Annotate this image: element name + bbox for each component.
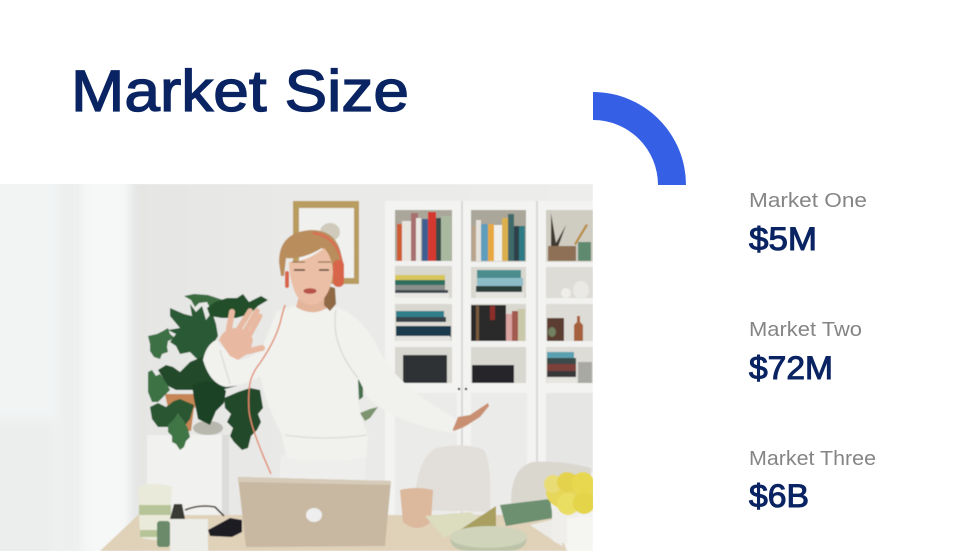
white stand (147, 435, 228, 515)
neck (296, 298, 328, 313)
market two stat: Market Two (749, 318, 862, 341)
shelf interiors (394, 266, 452, 384)
photo: woman dancing in home office (0, 164, 595, 551)
picture frame (293, 201, 359, 284)
shelf objects (551, 213, 566, 250)
flowers in vases (544, 472, 593, 544)
pot (165, 394, 198, 431)
face (289, 248, 333, 305)
pants (279, 455, 366, 483)
third row (396, 311, 444, 317)
hair (279, 230, 342, 278)
books top row (397, 224, 402, 261)
earphone cable (249, 305, 285, 474)
pencil holder, glass jar, phone (157, 504, 242, 551)
lower door panels (395, 393, 457, 550)
title: Market Size (71, 59, 409, 124)
plant (148, 294, 378, 450)
market two stat (749, 318, 862, 386)
ponytail (324, 285, 336, 311)
market three stat (749, 447, 876, 514)
headphones (313, 233, 342, 263)
books second row (395, 275, 445, 280)
market three stat: $6B (749, 478, 809, 514)
curtain (0, 164, 139, 551)
bookcase (386, 201, 593, 514)
market one stat: Market One (749, 189, 867, 212)
drinking glass (400, 488, 433, 528)
woman (203, 230, 489, 483)
table (100, 515, 567, 551)
papers and notebook (425, 499, 563, 547)
bottom row (403, 355, 447, 383)
raised hand (227, 311, 262, 352)
market one stat: $5M (749, 221, 817, 257)
extended hand (453, 403, 489, 431)
bowl (450, 526, 527, 551)
market two stat: $72M (749, 350, 833, 386)
wall (136, 184, 593, 515)
market three stat: Market Three (749, 447, 876, 470)
sweater (202, 323, 405, 414)
cup (138, 484, 172, 540)
market one stat (749, 189, 867, 257)
decorative quarter arc (593, 92, 686, 185)
chairs (414, 445, 591, 512)
shelves (395, 261, 452, 266)
cloth on stand (193, 421, 223, 435)
laptop (238, 477, 391, 547)
